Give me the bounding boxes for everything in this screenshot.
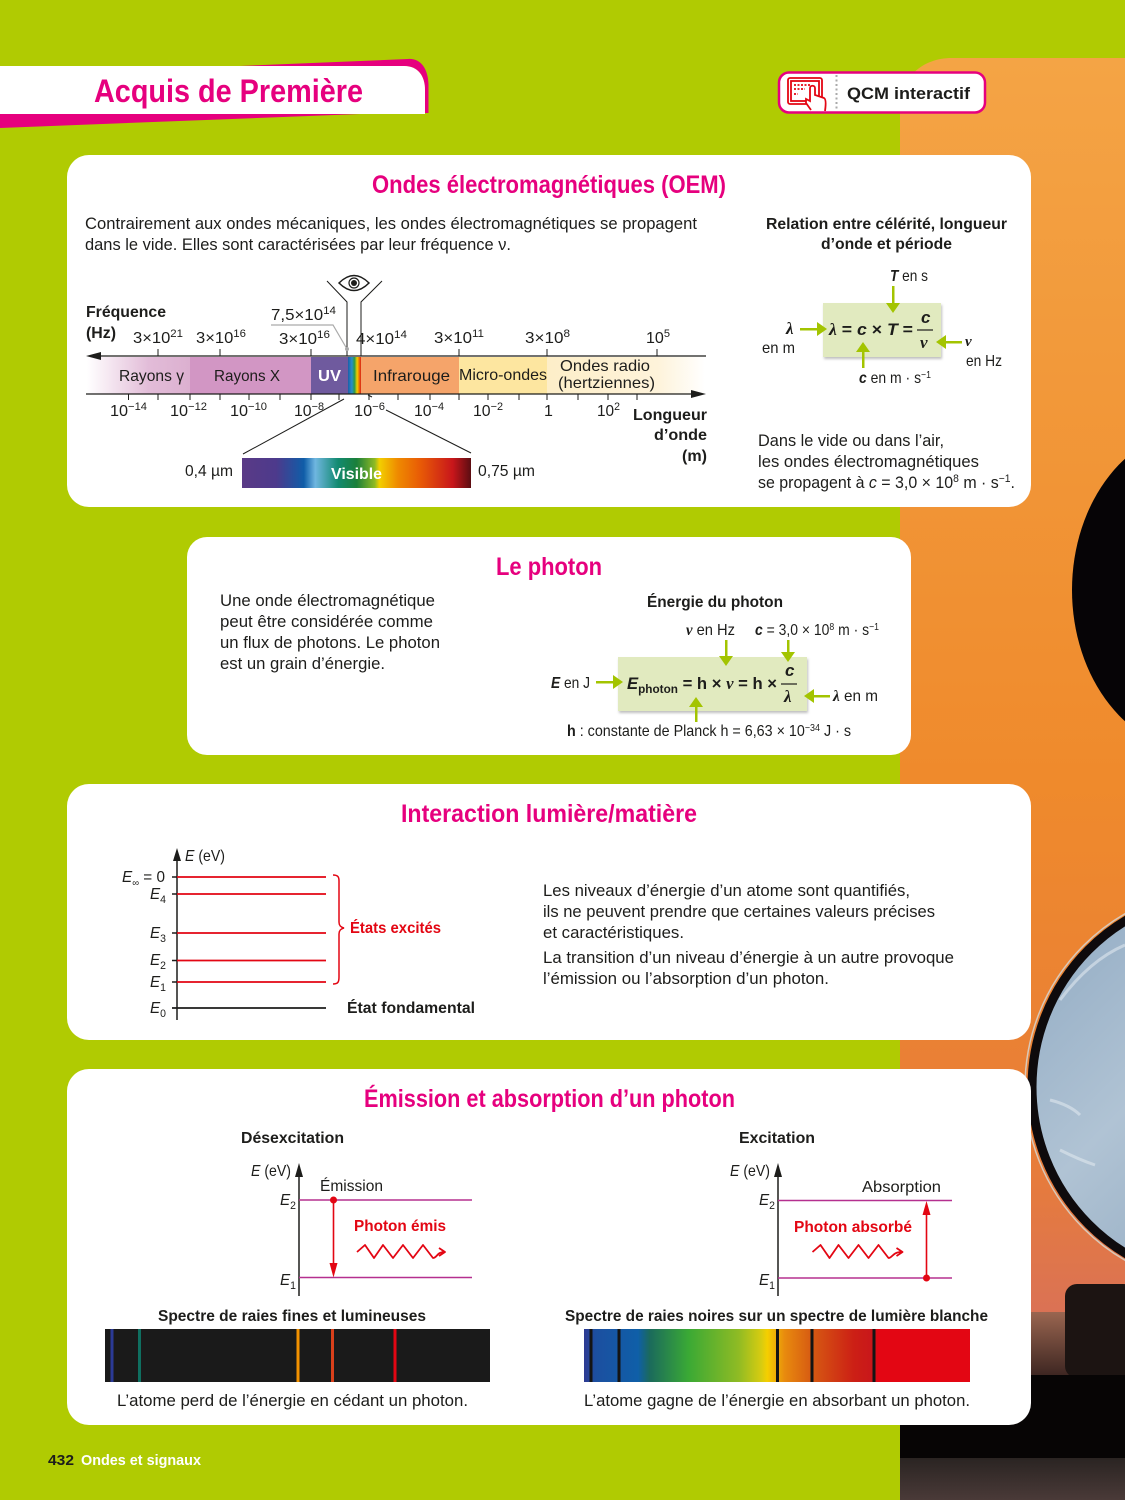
panel: ondes électromagnétiques <box>67 155 1031 507</box>
band labels: UV <box>318 368 341 385</box>
relation célérité longueur d'onde période <box>762 216 1007 387</box>
frequency labels: 11 <box>472 328 484 340</box>
frequency labels: 3×10 <box>133 330 169 347</box>
frequency labels: 14 <box>394 329 407 341</box>
chart: energy levels: 2 <box>160 960 166 972</box>
chart: emission diagram: Émission <box>320 1176 383 1195</box>
formula box: photon energy: ν = h × <box>726 674 778 693</box>
labels: −1 <box>921 370 931 381</box>
heading: le photon: Le photon <box>496 553 602 581</box>
wavelength labels: −4 <box>432 401 444 413</box>
chart: energy levels: E <box>150 952 160 969</box>
chart: energy levels: E <box>150 1000 160 1017</box>
band labels: Micro-ondes <box>459 367 547 384</box>
icon: eye with visible funnel <box>327 276 382 356</box>
frequency labels: 3×10 <box>525 330 561 347</box>
text: propagation in vacuum: 8 <box>953 473 959 485</box>
chart: energy levels: E (eV) <box>185 848 225 865</box>
wavelength labels: 1 <box>544 403 553 420</box>
header banner: Acquis de Première <box>0 59 428 128</box>
visible spectrum bar: Visible <box>331 466 382 483</box>
arrows <box>800 286 962 368</box>
intro text: dans le vide. Elles sont caractérisées par leur fréquence ν. <box>85 235 511 254</box>
wavelength labels: (m) <box>682 448 707 465</box>
frequency labels: 21 <box>170 328 183 340</box>
labels: 8 <box>829 622 835 633</box>
chart: emission diagram: 1 <box>290 1280 296 1292</box>
band labels: Rayons γ <box>119 368 184 385</box>
wavelength labels: 10 <box>354 403 372 420</box>
chart: energy levels: E <box>150 974 160 991</box>
footer: page number and section: 432 <box>48 1452 74 1469</box>
formula box: ν <box>920 333 928 352</box>
left column: désexcitation <box>105 1130 490 1410</box>
arrows <box>596 640 830 722</box>
formula box <box>823 303 941 357</box>
labels: J · s <box>820 723 851 740</box>
frequency labels: 7,5×10 <box>271 307 320 324</box>
wavelength labels: 10 <box>414 403 432 420</box>
band labels <box>119 358 655 392</box>
panel: émission et absorption <box>67 1069 1031 1425</box>
formula box: c <box>921 308 931 327</box>
frequency labels: 3×10 <box>434 330 470 347</box>
text: propagation in vacuum: les ondes électromagnétiques <box>758 452 979 471</box>
chart: energy levels: 4 <box>160 894 166 906</box>
band labels: Rayons X <box>214 368 280 385</box>
text: propagation in vacuum: se propagent à c = 3,0 × 10 <box>758 473 958 492</box>
labels: h : constante de Planck h = 6,63 × 10 <box>567 723 832 740</box>
labels <box>551 622 879 740</box>
wavelength labels: −14 <box>128 401 147 413</box>
chart: energy levels <box>122 848 475 1020</box>
chart: energy levels: 3 <box>160 933 166 945</box>
text: propagation in vacuum: . <box>1011 473 1015 492</box>
chart: absorption diagram: E <box>759 1192 769 1209</box>
wavelength labels: 10 <box>597 403 615 420</box>
explanatory text <box>543 881 954 988</box>
frequency labels: 14 <box>323 305 336 317</box>
frequency labels: 8 <box>563 328 570 340</box>
chart: energy levels: ∞ <box>132 878 139 889</box>
photon text: est un grain d’énergie. <box>220 654 385 673</box>
panel: interaction lumière/matière <box>67 784 1031 1040</box>
photon text: peut être considérée comme <box>220 612 433 631</box>
chart: emission diagram: E <box>280 1272 290 1289</box>
frequency labels: 5 <box>664 328 670 340</box>
intro text: Contrairement aux ondes mécaniques, les ondes électromagnétiques se propagent <box>85 214 697 233</box>
frequency labels: 16 <box>233 328 246 340</box>
text: propagation in vacuum: m · s <box>959 473 999 492</box>
labels: en m <box>762 340 795 357</box>
frequency labels: 10 <box>646 330 664 347</box>
right column: excitation: Excitation <box>739 1130 815 1147</box>
wavelength labels: 10 <box>230 403 248 420</box>
labels: ν <box>965 334 972 350</box>
wavelength labels <box>110 401 707 465</box>
emission line spectrum <box>105 1308 490 1410</box>
labels: −1 <box>869 622 879 633</box>
wavelength labels: −10 <box>248 401 267 413</box>
heading: émission et absorption: Émission et absorption d’un photon <box>364 1084 735 1113</box>
relation célérité longueur d'onde période: d’onde et période <box>821 236 952 253</box>
visible spectrum bar: 0,4 µm <box>185 463 233 480</box>
labels: c = 3,0 × 10 <box>755 622 839 639</box>
chart: emission diagram <box>251 1163 472 1296</box>
wavelength labels: 10 <box>294 403 312 420</box>
chart: absorption diagram: 1 <box>769 1280 775 1292</box>
chart: energy levels: 1 <box>160 982 166 994</box>
photon text: Une onde électromagnétique <box>220 591 435 610</box>
labels: m · s <box>834 622 869 639</box>
photon text <box>220 591 440 673</box>
text: propagation in vacuum <box>758 431 1015 492</box>
subheading: énergie du photon: Énergie du photon <box>647 592 783 611</box>
wavelength labels: Longueur <box>633 407 707 424</box>
formula box: photon energy: c <box>785 661 795 680</box>
explanatory text: ils ne peuvent prendre que certaines valeurs précises <box>543 902 935 921</box>
frequency labels: 16 <box>317 329 330 341</box>
chart: emission diagram: E (eV) <box>251 1163 291 1180</box>
band labels: (hertziennes) <box>558 375 655 392</box>
chart: energy levels: États excités <box>350 918 441 937</box>
absorption line spectrum: Spectre de raies noires sur un spectre de lumière blanche <box>565 1308 988 1325</box>
wavelength labels: −2 <box>491 401 503 413</box>
intro text <box>85 214 697 254</box>
labels: λ en m <box>832 688 878 705</box>
heading: interaction: Interaction lumière/matière <box>401 800 697 828</box>
explanatory text: La transition d’un niveau d’énergie à un autre provoque <box>543 948 954 967</box>
formula box: photon energy: λ <box>783 687 792 706</box>
frequency labels: 3×10 <box>279 331 315 348</box>
wavelength labels: 10 <box>170 403 188 420</box>
labels: c en m · s <box>859 370 929 387</box>
wavelength labels: −6 <box>372 401 385 413</box>
chart: emission diagram: Photon émis <box>354 1218 446 1235</box>
wavelength labels: −12 <box>188 401 207 413</box>
chart: energy levels: État fondamental <box>347 998 475 1017</box>
frequency labels <box>86 304 670 348</box>
emission line spectrum: Spectre de raies fines et lumineuses <box>158 1308 426 1325</box>
formula box: λ = c × T = <box>828 320 913 339</box>
chart: energy levels: E <box>150 925 160 942</box>
labels <box>762 268 1002 387</box>
chart: emission diagram: E <box>280 1192 290 1209</box>
text: propagation in vacuum: Dans le vide ou dans l’air, <box>758 431 944 450</box>
heading: OEM: Ondes électromagnétiques (OEM) <box>372 171 726 199</box>
wavelength labels: 10 <box>110 403 128 420</box>
labels: T en s <box>890 268 928 285</box>
chart: absorption diagram: E <box>759 1272 769 1289</box>
formula box: photon energy: = h × <box>678 674 726 693</box>
wavelength labels: 10 <box>473 403 491 420</box>
frequency labels: (Hz) <box>86 325 116 342</box>
photon text: un flux de photons. Le photon <box>220 633 440 652</box>
chart: energy levels: = 0 <box>139 869 165 886</box>
left column: désexcitation: Désexcitation <box>241 1130 344 1147</box>
icon: tablet with pointing hand <box>788 78 826 111</box>
wavelength labels: 2 <box>614 401 620 413</box>
frequency labels: 3×10 <box>196 330 232 347</box>
absorption line spectrum <box>565 1308 988 1410</box>
explanatory text: l’émission ou l’absorption d’un photon. <box>543 969 829 988</box>
chart: absorption diagram: 2 <box>769 1200 775 1212</box>
chart: emission diagram: 2 <box>290 1200 296 1212</box>
labels: −34 <box>805 723 820 734</box>
relation célérité longueur d'onde période: Relation entre célérité, longueur <box>766 216 1007 233</box>
explanatory text: Les niveaux d’énergie d’un atome sont quantifiés, <box>543 881 910 900</box>
labels: λ <box>785 319 794 338</box>
chart: absorption diagram <box>730 1163 952 1296</box>
page title: Acquis de Première <box>94 73 363 109</box>
emission line spectrum: L’atome perd de l’énergie en cédant un photon. <box>117 1391 468 1410</box>
visible spectrum bar: 0,75 µm <box>478 463 535 480</box>
formula box: photon energy: photon <box>638 682 678 696</box>
band labels: Ondes radio <box>560 358 650 375</box>
photo background: orange wall with lamp and mirror <box>900 58 1125 1500</box>
wavelength labels: d’onde <box>654 427 707 444</box>
chart: absorption diagram: Absorption <box>862 1179 941 1196</box>
footer: page number and section: Ondes et signaux <box>81 1452 202 1469</box>
chart: electromagnetic spectrum <box>86 276 707 488</box>
QCM interactif button: QCM interactif <box>847 84 970 103</box>
explanatory text: et caractéristiques. <box>543 923 684 942</box>
labels: E en J <box>551 675 590 692</box>
chart: absorption diagram: Photon absorbé <box>794 1219 912 1236</box>
visible spectrum bar <box>185 458 535 488</box>
chart: energy levels: 0 <box>160 1008 166 1020</box>
formula box: photon energy <box>618 657 807 711</box>
frequency labels: 4×10 <box>356 331 392 348</box>
formula box: photon energy: E <box>627 674 639 693</box>
chart: energy levels: E <box>122 869 133 886</box>
right column: excitation <box>565 1130 988 1410</box>
chart: absorption diagram: E (eV) <box>730 1163 770 1180</box>
wavelength labels: −8 <box>312 401 324 413</box>
labels: en Hz <box>966 353 1002 370</box>
labels: ν en Hz <box>686 622 735 639</box>
QCM interactif button <box>779 72 985 112</box>
absorption line spectrum: L’atome gagne de l’énergie en absorbant un photon. <box>584 1391 970 1410</box>
chart: energy levels: E <box>150 886 160 903</box>
frequency labels: Fréquence <box>86 304 166 321</box>
text: propagation in vacuum: −1 <box>999 473 1011 485</box>
band labels: Infrarouge <box>373 368 450 385</box>
panel: le photon <box>187 537 911 755</box>
